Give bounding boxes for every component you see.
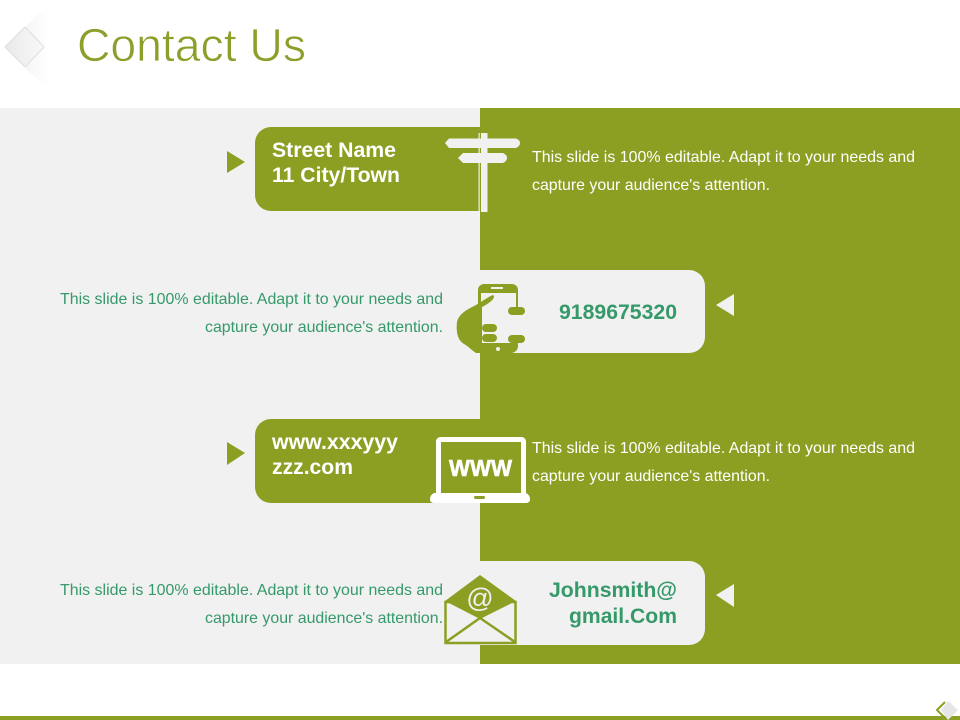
phone number: 9189675320: [559, 301, 677, 324]
arrow: email: [716, 584, 734, 607]
website card: [255, 419, 480, 503]
icon: signpost: [445, 133, 520, 212]
website description: capture your audience's attention.: [532, 468, 770, 485]
icon: envelope: @: [466, 583, 494, 613]
icon: laptop: [430, 440, 530, 503]
footer bar: [0, 716, 960, 720]
email text: Johnsmith@: [549, 579, 677, 602]
address row: [227, 127, 915, 212]
address card: [255, 127, 480, 211]
address text: 11 City/Town: [272, 164, 400, 187]
arrow: phone: [716, 294, 734, 316]
arrow: website: [227, 442, 245, 465]
address description: This slide is 100% editable. Adapt it to your needs and: [532, 149, 915, 166]
icon: laptop: WWW: [449, 455, 512, 481]
email row: [60, 561, 734, 645]
website text: www.xxxyyy: [271, 431, 398, 454]
arrow: address: [227, 151, 245, 173]
icon: envelope: [445, 575, 516, 643]
address text: Street Name: [272, 139, 396, 162]
email description: This slide is 100% editable. Adapt it to your needs and: [60, 582, 443, 599]
website row: [227, 419, 915, 503]
footer diamond logo: [937, 701, 958, 720]
right background panel: [480, 108, 960, 664]
phone row: [60, 270, 734, 353]
phone description: capture your audience's attention.: [205, 319, 443, 336]
title: Contact Us: [77, 19, 306, 71]
icon: hand holding phone: [457, 284, 525, 353]
email card: [480, 561, 705, 645]
left background panel: [0, 108, 480, 664]
address description: capture your audience's attention.: [532, 177, 770, 194]
decorative diamond logo: [5, 8, 49, 86]
website description: This slide is 100% editable. Adapt it to your needs and: [532, 440, 915, 457]
email text: gmail.Com: [569, 605, 677, 628]
website text: zzz.com: [272, 456, 353, 479]
phone card: [480, 270, 705, 353]
email description: capture your audience's attention.: [205, 610, 443, 627]
phone description: This slide is 100% editable. Adapt it to your needs and: [60, 291, 443, 308]
